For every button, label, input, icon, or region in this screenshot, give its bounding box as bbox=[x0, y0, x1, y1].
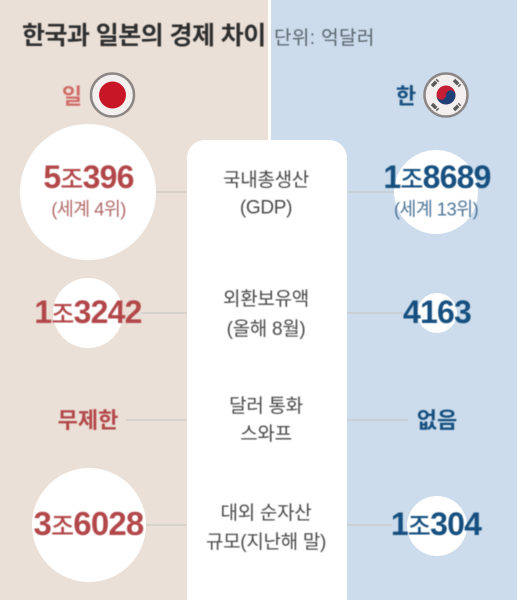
GDP label: 국내총생산 bbox=[223, 169, 309, 191]
Korea net assets bubble bbox=[391, 496, 482, 556]
Korea net assets bubble: 1조304 bbox=[391, 506, 482, 542]
Japan GDP bubble: (세계 4위) bbox=[51, 198, 126, 220]
row: FX reserves bbox=[34, 278, 471, 348]
panel: Japan background bbox=[0, 0, 268, 600]
Korea GDP bubble: (세계 13위) bbox=[394, 198, 479, 220]
row: GDP bbox=[20, 124, 491, 260]
swap label: 스와프 bbox=[240, 423, 292, 445]
Japan header: 일 bbox=[62, 84, 82, 109]
row: net external assets bbox=[32, 468, 482, 582]
panel: center category column bbox=[187, 140, 347, 600]
reserves label: (올해 8월) bbox=[227, 318, 305, 340]
Japan swap value: 무제한 bbox=[58, 408, 118, 433]
Korea GDP bubble: 1조8689 bbox=[383, 159, 491, 195]
Japan reserves bubble: 1조3242 bbox=[34, 294, 142, 330]
reserves label: 외환보유액 bbox=[223, 288, 309, 310]
GDP label: (GDP) bbox=[240, 198, 292, 218]
Korea header bbox=[396, 74, 468, 116]
Japan GDP bubble bbox=[20, 124, 156, 260]
unit label: 단위: 억달러 bbox=[274, 27, 375, 49]
net assets label: 대외 순자산 bbox=[221, 502, 311, 524]
icon: Korea flag bbox=[424, 74, 468, 116]
Korea reserves bubble: 4163 bbox=[403, 294, 471, 330]
title: 한국과 일본의 경제 차이 bbox=[22, 22, 266, 50]
swap label: 달러 통화 bbox=[229, 395, 303, 417]
Japan reserves bubble bbox=[34, 278, 142, 348]
Korea GDP bubble bbox=[383, 150, 491, 234]
Japan GDP bubble: 5조396 bbox=[43, 159, 134, 195]
icon: Japan flag bbox=[91, 74, 134, 116]
Korea header: 한 bbox=[396, 84, 416, 109]
panel: Korea background bbox=[271, 0, 517, 600]
net assets label: 규모(지난해 말) bbox=[206, 531, 326, 553]
Japan net assets bubble: 3조6028 bbox=[34, 505, 144, 542]
Korea swap value: 없음 bbox=[417, 408, 457, 433]
row: dollar swap bbox=[58, 395, 457, 445]
Japan header bbox=[62, 74, 134, 116]
connector lines bbox=[126, 192, 408, 525]
Japan net assets bubble bbox=[32, 468, 146, 582]
